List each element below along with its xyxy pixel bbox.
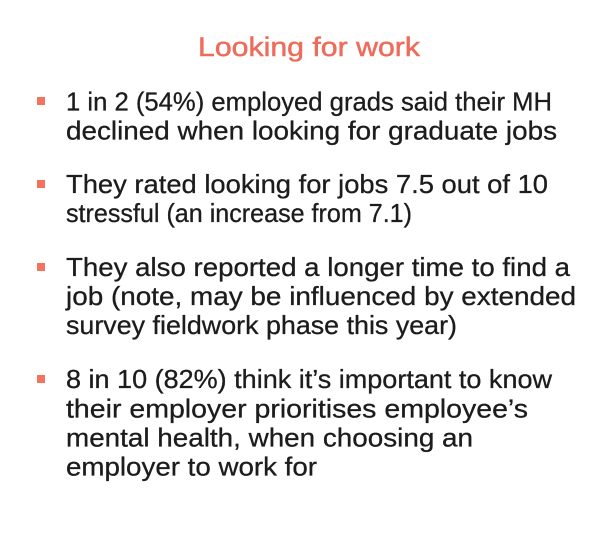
bullet: stress rating: [37, 169, 548, 228]
bullet: stress rating: stressful (an increase from 7.1): [66, 198, 412, 228]
bullet: time to find a job: survey fieldwork phase this year): [66, 310, 457, 340]
bullet: time to find a job: [37, 252, 576, 340]
bullet: employer priorities: 8 in 10 (82%) think it’s important to know: [66, 364, 552, 394]
bullet: employer priorities: their employer prioritises employee’s: [66, 394, 528, 424]
bullet: stress rating: They rated looking for jobs 7.5 out of 10: [66, 169, 548, 199]
bullet: job search and mental health: declined when looking for graduate jobs: [66, 116, 557, 146]
bullet: job search and mental health: 1 in 2 (54%) employed grads said their MH: [66, 86, 552, 116]
bullet: time to find a job: They also reported a longer time to find a: [66, 252, 571, 282]
bullet: job search and mental health: [37, 86, 557, 146]
bullet: time to find a job: job (note, may be influenced by extended: [65, 281, 576, 311]
title: Looking for work: [198, 32, 421, 62]
bullet: employer priorities: [37, 364, 552, 482]
bullet: employer priorities: employer to work for: [66, 452, 317, 482]
bullet: employer priorities: mental health, when choosing an: [66, 422, 473, 452]
